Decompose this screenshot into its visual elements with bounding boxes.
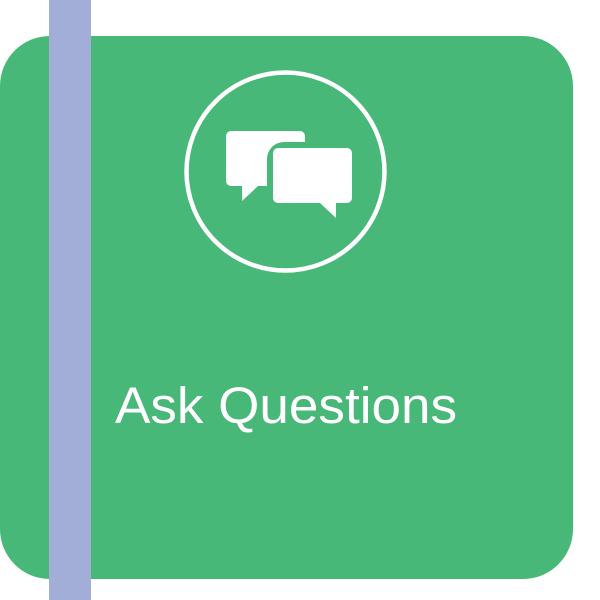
heading: Ask Questions bbox=[115, 377, 457, 434]
vertical lavender band bbox=[49, 0, 91, 600]
icon ring bbox=[186, 72, 384, 270]
icon: left speech bubble bbox=[226, 131, 305, 201]
icon: speech bubbles in circle bbox=[186, 72, 384, 270]
icon: right speech bubble bbox=[273, 148, 352, 218]
